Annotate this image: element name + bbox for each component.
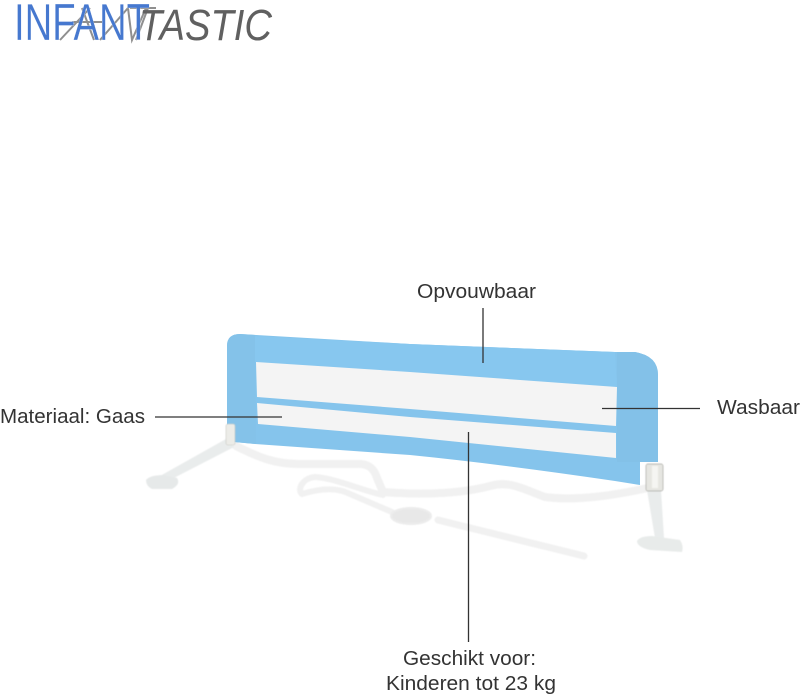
leader line: Geschikt voor	[468, 432, 470, 642]
left bracket and foot	[146, 424, 235, 489]
lower mesh panel	[257, 403, 616, 458]
label: Geschikt voor: Geschikt voor:	[403, 648, 536, 670]
label: Opvouwbaar: Opvouwbaar	[417, 281, 536, 303]
upper mesh panel	[256, 362, 617, 426]
label: Materiaal: Materiaal: Gaas	[0, 406, 145, 428]
bed rail	[227, 334, 658, 485]
leader line: Materiaal	[155, 416, 282, 418]
right side panel shading	[617, 352, 658, 462]
label: Wasbaar: Wasbaar	[717, 397, 800, 419]
leader line: Opvouwbaar	[482, 308, 484, 363]
left side panel shading	[227, 334, 256, 444]
top band highlight	[255, 336, 617, 387]
leader line: Wasbaar	[602, 408, 700, 410]
anchor disc	[391, 508, 431, 524]
rail fabric	[227, 334, 658, 485]
right bracket and foot	[637, 464, 683, 552]
logo: Infantastic: TASTIC	[139, 1, 273, 50]
label: Geschikt voor	[386, 648, 556, 695]
straps and anchor	[236, 446, 648, 556]
label: Geschikt voor: Kinderen tot 23 kg	[386, 673, 556, 695]
